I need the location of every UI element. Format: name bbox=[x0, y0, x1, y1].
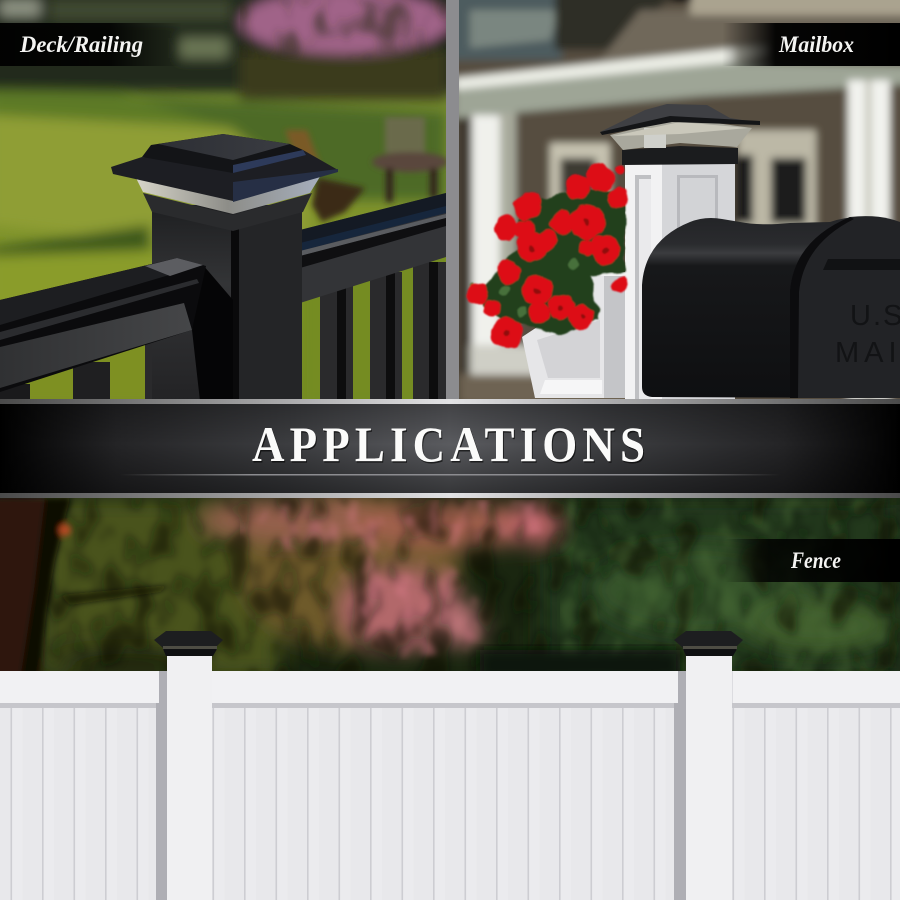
label: Deck/Railing bbox=[0, 23, 182, 66]
label: Deck/Railing: Deck/Railing bbox=[19, 32, 143, 58]
garden furniture bbox=[285, 117, 448, 222]
label: Mailbox: Mailbox bbox=[778, 32, 854, 58]
solar panel face bbox=[158, 134, 290, 160]
panel: deck railing photo bbox=[0, 0, 470, 405]
black post bbox=[152, 205, 302, 401]
icon: solar post cap bbox=[111, 134, 338, 231]
tree trunk bbox=[0, 498, 170, 680]
icon: fence post cap right bbox=[674, 631, 743, 656]
right rail bbox=[300, 193, 446, 303]
mailbox lettering bbox=[838, 304, 900, 362]
heading shadow: APPLICATIONS bbox=[253, 420, 646, 474]
foliage highlight texture bbox=[560, 498, 900, 678]
red flowers and foliage bbox=[467, 164, 628, 349]
label: Fence bbox=[725, 539, 900, 582]
fence rail grooves bbox=[0, 703, 900, 708]
lawn and blurred garden background bbox=[0, 0, 470, 405]
cap light lens bbox=[135, 175, 321, 214]
foliage bbox=[482, 190, 625, 335]
flower centres bbox=[504, 219, 608, 336]
mailbox flag slot bbox=[823, 259, 900, 270]
panel: white vinyl fence bbox=[0, 656, 900, 900]
fence top rails bbox=[0, 671, 900, 703]
fence post shadows bbox=[156, 671, 686, 900]
petals bbox=[467, 164, 628, 349]
white lantern post bbox=[622, 146, 738, 402]
fence posts bbox=[167, 656, 732, 900]
flower planter bbox=[522, 272, 625, 398]
vertical divider bbox=[446, 0, 459, 400]
blurred house background bbox=[450, 0, 900, 410]
post collar bbox=[622, 146, 738, 165]
panel: mailbox photo bbox=[450, 0, 900, 410]
icon: solar post cap on post bbox=[600, 104, 760, 150]
icon: fence post cap left bbox=[154, 631, 223, 656]
blossom shadow texture bbox=[240, 0, 446, 60]
icon: black mailbox bbox=[642, 216, 900, 398]
banner bbox=[0, 399, 900, 498]
blossom texture bbox=[240, 500, 560, 660]
heading: APPLICATIONS bbox=[252, 418, 645, 473]
railing balusters bbox=[0, 262, 446, 402]
left rail bbox=[0, 258, 206, 392]
cap brim bbox=[111, 150, 338, 201]
cap upper tier bbox=[142, 134, 303, 173]
cap collar bbox=[143, 193, 312, 231]
label: Fence: Fence bbox=[790, 548, 841, 574]
foliage shadow texture bbox=[0, 498, 900, 678]
dark ground strip bbox=[480, 650, 680, 680]
panel: fence background foliage bbox=[0, 490, 900, 680]
mailbox door bbox=[790, 216, 900, 398]
fence boards bbox=[0, 708, 900, 900]
label: Mailbox bbox=[722, 23, 900, 66]
